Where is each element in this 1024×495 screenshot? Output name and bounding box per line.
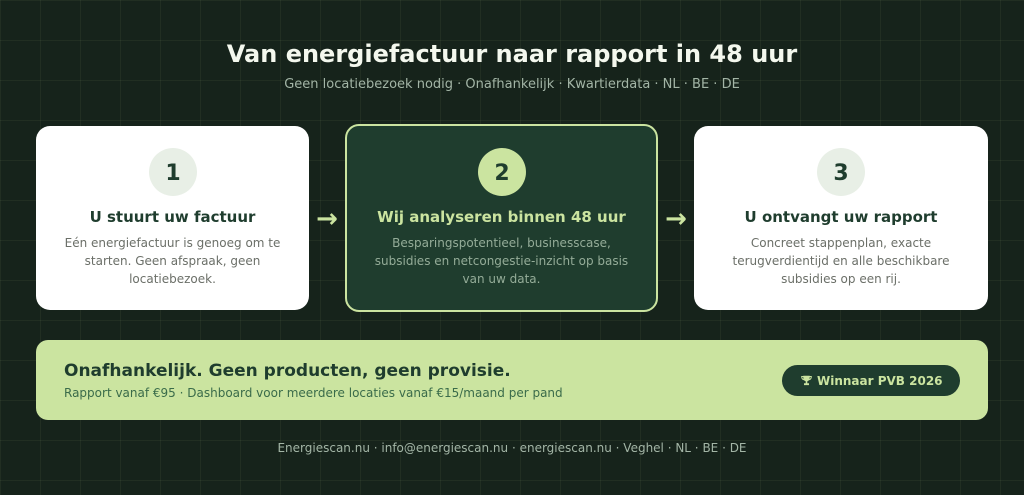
title: Van energiefactuur naar rapport in 48 uur — [227, 40, 797, 68]
step 2 text: Besparingspotentieel, businesscase, — [392, 236, 611, 250]
step number 1 — [149, 148, 197, 196]
badge: winner — [782, 365, 960, 396]
step number 3 — [817, 148, 865, 196]
step 2 text: van uw data. — [463, 272, 540, 286]
step 1 text: locatiebezoek. — [129, 272, 216, 286]
step 2 heading: Wij analyseren binnen 48 uur — [377, 208, 626, 226]
step 1 text: Eén energiefactuur is genoeg om te — [65, 236, 280, 250]
footer: Energiescan.nu · info@energiescan.nu · energiescan.nu · Veghel · NL · BE · DE — [277, 441, 747, 455]
step 1 text — [65, 236, 280, 286]
step number 1: 1 — [165, 161, 181, 186]
step 2 text — [375, 236, 628, 286]
step 2 text: subsidies en netcongestie-inzicht op basis — [375, 254, 628, 268]
banner heading: Onafhankelijk. Geen producten, geen provisie. — [64, 361, 511, 381]
step 1 text: starten. Geen afspraak, geen — [85, 254, 260, 268]
step 3 text: Concreet stappenplan, exacte — [751, 236, 931, 250]
panel: step 1 — [36, 126, 309, 310]
panel: step 2 — [345, 124, 658, 312]
subtitle: Geen locatiebezoek nodig · Onafhankelijk · Kwartierdata · NL · BE · DE — [284, 77, 740, 92]
step 1 heading: U stuurt uw factuur — [90, 208, 255, 226]
arrow 2 to 3: → — [665, 204, 687, 234]
step 3 text: subsidies op een rij. — [781, 272, 901, 286]
icon: trophy — [801, 376, 812, 386]
panel: banner — [36, 340, 988, 420]
step 3 heading: U ontvangt uw rapport — [745, 208, 937, 226]
step number 3: 3 — [833, 161, 849, 186]
step number 2: 2 — [494, 161, 510, 186]
badge label: Winnaar PVB 2026 — [817, 374, 943, 388]
step number 2 — [478, 148, 526, 196]
step 3 text — [732, 236, 949, 286]
step 3 text: terugverdientijd en alle beschikbare — [732, 254, 949, 268]
banner text: Rapport vanaf €95 · Dashboard voor meerdere locaties vanaf €15/maand per pand — [64, 386, 563, 400]
panel: step 3 — [694, 126, 988, 310]
arrow 1 to 2: → — [316, 204, 338, 234]
